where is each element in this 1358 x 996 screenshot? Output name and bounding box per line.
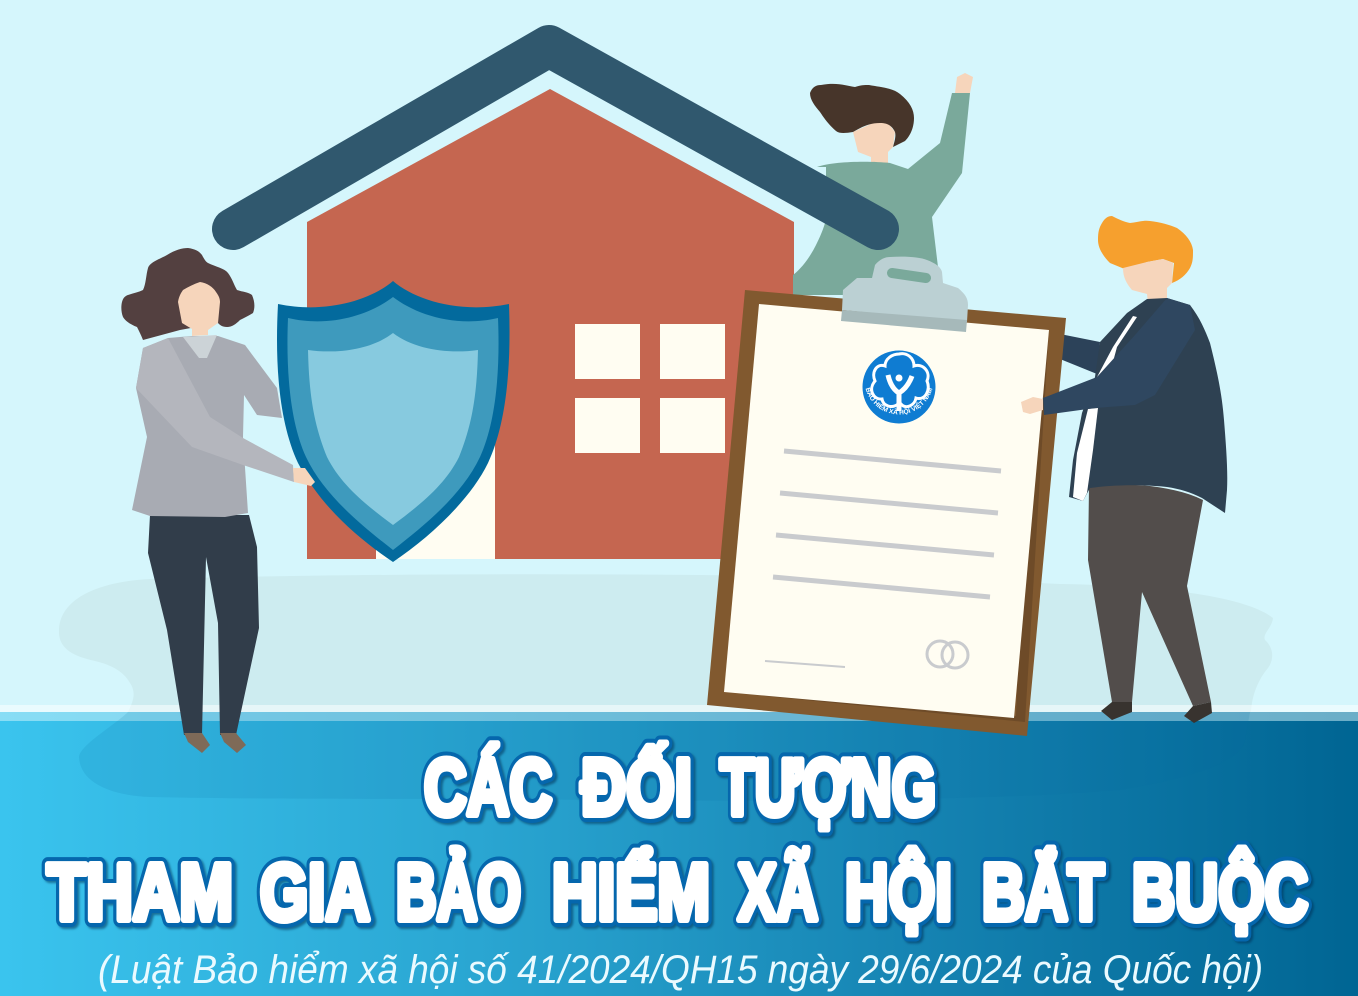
shirt stripe lower [1073, 408, 1098, 501]
document text lines [773, 451, 1001, 597]
face [1123, 259, 1173, 303]
title line 2: GIA [260, 848, 370, 936]
clipboard [707, 256, 1066, 736]
clipboard paper [724, 304, 1049, 718]
title line 2: BẮT [982, 848, 1104, 936]
title band [0, 712, 1358, 996]
title line 1: TƯỢNG [720, 742, 936, 832]
signature line [765, 661, 845, 667]
title line 2: GIA [260, 848, 370, 936]
shield [277, 281, 510, 562]
title line 1: CÁC [424, 742, 552, 832]
title line 1 [424, 742, 936, 832]
house window [575, 324, 725, 453]
hand [955, 73, 973, 93]
torso and arm [793, 93, 970, 295]
title line 2: XÃ [738, 848, 818, 936]
far arm [1060, 334, 1100, 374]
house wall [307, 89, 794, 559]
subtitle: (Luật Bảo hiểm xã hội số 41/2024/QH15 ngày 29/6/2024 của Quốc hội) [98, 948, 1263, 992]
torso [132, 336, 248, 517]
ground shape [59, 574, 1273, 712]
face [853, 123, 895, 165]
shoes [184, 733, 246, 753]
title line 1: TƯỢNG [720, 742, 936, 832]
person: green shirt raising arm [793, 73, 973, 295]
title [47, 742, 1308, 936]
clipboard clip [841, 257, 968, 332]
title line 2: THAM [47, 848, 233, 936]
board shadow [725, 330, 1049, 722]
title line 2 [47, 848, 1308, 936]
house roof [233, 46, 878, 229]
far arm [240, 345, 282, 418]
title line 2: BẮT [982, 848, 1104, 936]
clipboard board [707, 290, 1066, 736]
title line 2: XÃ [738, 848, 818, 936]
title line 1: CÁC [424, 742, 552, 832]
hair [1098, 216, 1193, 283]
person: woman with shield [121, 248, 294, 753]
title line 1: ĐỐI [581, 742, 692, 832]
stamp rings [927, 641, 968, 668]
title line 2: HIỂM [552, 848, 710, 936]
person: man in navy jacket [1060, 216, 1227, 723]
social insurance logo: BẢO HIỂM XÃ HỘI VIỆT NAM [866, 388, 932, 415]
hair [121, 248, 254, 340]
shoes [1101, 702, 1212, 723]
house [307, 89, 794, 559]
legs [148, 515, 259, 735]
collar [183, 335, 217, 358]
social insurance logo [862, 350, 936, 424]
house door [376, 440, 495, 559]
near arm [136, 338, 294, 482]
title line 1: ĐỐI [581, 742, 692, 832]
shirt stripe upper [1097, 316, 1137, 377]
man's near arm and hand [1021, 298, 1195, 415]
title line 2: BẢO [396, 848, 521, 936]
hair [810, 84, 914, 147]
light strip above title band [0, 705, 1358, 712]
title line 2: HỘI [845, 848, 952, 936]
face [178, 282, 220, 336]
title line 2: THAM [47, 848, 233, 936]
title line 2: HIỂM [552, 848, 710, 936]
hand of woman on shield [293, 468, 315, 486]
title line 2: BẢO [396, 848, 521, 936]
trousers [1088, 485, 1211, 706]
jacket [1069, 298, 1227, 513]
title line 2: HỘI [845, 848, 952, 936]
